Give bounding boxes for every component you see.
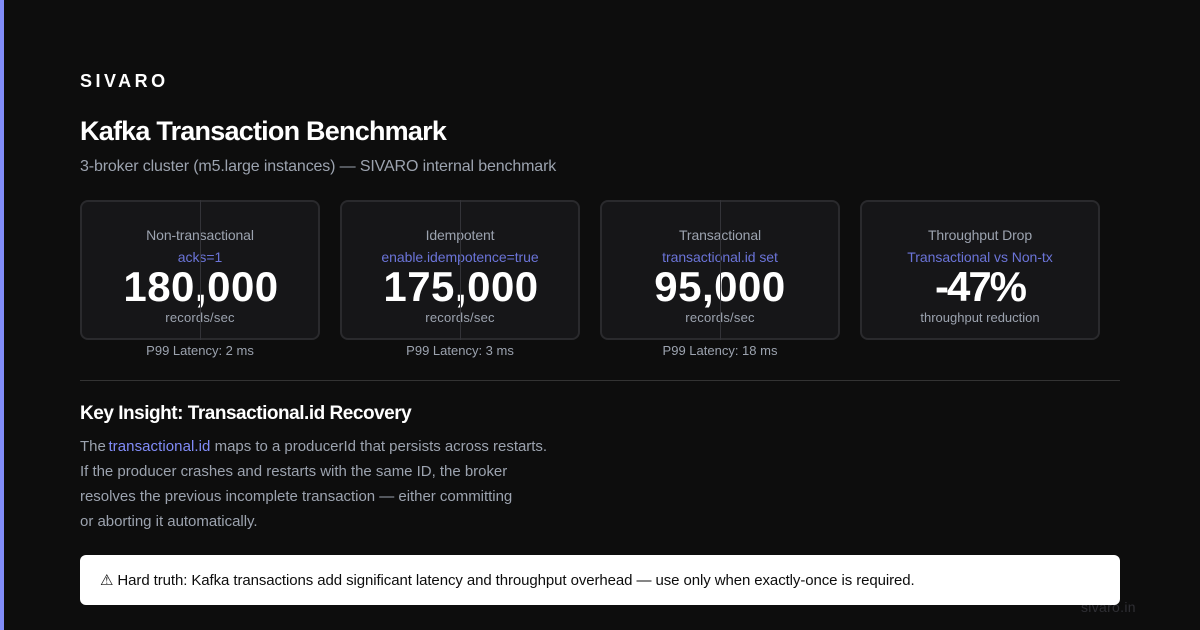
panel: throughput drop	[860, 200, 1100, 340]
unit: records/sec	[685, 310, 755, 325]
insight body: resolves the previous incomplete transaction — either committing	[80, 488, 512, 505]
subtitle: 3-broker cluster (m5.large instances) — SIVARO internal benchmark	[80, 158, 556, 175]
latency: P99 Latency: 2 ms	[146, 343, 254, 358]
insight heading: Key Insight: Transactional.id Recovery	[80, 403, 411, 424]
brand logo: SIVARO	[80, 71, 169, 91]
config: acks=1	[178, 249, 222, 265]
label: Non-transactional	[146, 227, 254, 243]
unit: throughput reduction	[920, 310, 1040, 325]
insight body: If the producer crashes and restarts with the same ID, the broker	[80, 463, 507, 480]
config: Transactional vs Non-tx	[907, 249, 1053, 265]
panel: idempotent	[340, 200, 580, 358]
label: Idempotent	[426, 227, 494, 243]
config: enable.idempotence=true	[381, 249, 539, 265]
value: -47%	[935, 263, 1025, 310]
panel: non-transactional	[80, 200, 320, 358]
label: Transactional	[679, 227, 761, 243]
label: Throughput Drop	[928, 227, 1032, 243]
accent bar	[0, 0, 4, 630]
insight body: or aborting it automatically.	[80, 513, 258, 530]
value: 175,000	[383, 263, 539, 310]
insight body: The transactional.id maps to a producerId that persists across restarts.	[80, 438, 547, 455]
value: 95,000	[654, 263, 786, 310]
latency: P99 Latency: 3 ms	[406, 343, 514, 358]
callout: hard truth	[80, 555, 1120, 605]
panel: transactional	[600, 200, 840, 358]
config: transactional.id set	[662, 249, 778, 265]
latency: P99 Latency: 18 ms	[663, 343, 777, 358]
title: Kafka Transaction Benchmark	[80, 116, 446, 146]
callout: hard truth: ⚠ Hard truth: Kafka transactions add significant latency and throughput overhead — use only when exactly-once is required.	[100, 572, 915, 589]
insight body	[80, 438, 547, 530]
unit: records/sec	[165, 310, 235, 325]
value: 180,000	[123, 263, 279, 310]
unit: records/sec	[425, 310, 495, 325]
footer url: sivaro.in	[1081, 599, 1136, 615]
